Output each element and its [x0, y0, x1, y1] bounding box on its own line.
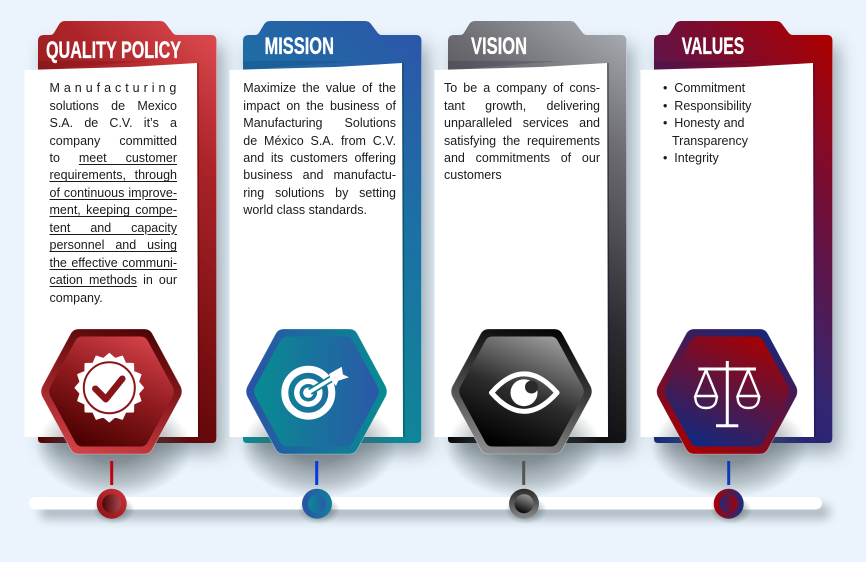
panel: vision [434, 21, 644, 495]
text: quality policy body: to meet customer [50, 151, 177, 165]
timeline [29, 461, 834, 524]
connector and node: quality policy [93, 461, 135, 524]
text: quality policy body: company. [50, 290, 103, 304]
text: vision body [444, 81, 600, 182]
text: values list: Honesty and [674, 116, 744, 130]
text: values list: • [663, 81, 667, 95]
text: quality policy body: requirements, through [50, 168, 177, 182]
text: vision body: unparalleled services and [444, 116, 600, 130]
text: quality policy body: solutions de Mexico [50, 99, 177, 113]
text: vision body: To be a company of cons- [444, 81, 600, 95]
icon: hexagon badge with seal and check [41, 329, 182, 454]
text: values list [663, 81, 752, 165]
card background: mission [243, 21, 422, 443]
text: quality policy body: S.A. de C.V. it’s a [50, 116, 177, 130]
text: quality policy body [50, 81, 180, 304]
timeline bar [29, 497, 822, 510]
icon: hexagon badge with target [246, 329, 387, 454]
text: mission body: de México S.A. from C.V. [243, 134, 396, 148]
connector and node: mission [298, 461, 340, 524]
heading: quality policy: QUALITY POLICY [46, 37, 181, 64]
text: values list: • [663, 116, 667, 130]
text: quality policy body: cation methods in our [50, 273, 177, 287]
heading: mission: MISSION [264, 33, 334, 60]
card background: vision [448, 21, 626, 443]
text: mission body: business and manufactu- [243, 168, 396, 182]
text: values list: Transparency [672, 134, 748, 148]
text: mission body: Manufacturing Solutions [243, 116, 396, 130]
card background: quality policy [38, 21, 216, 443]
text: values list: • [663, 151, 667, 165]
text: quality policy body: personnel and using [50, 238, 177, 252]
text: mission body: ring solutions by setting [243, 186, 396, 200]
panel: mission [230, 21, 440, 495]
heading: vision: VISION [471, 33, 527, 60]
text: mission body: Maximize the value of the [243, 81, 396, 95]
text: vision body: satisfying the requirements [444, 134, 600, 148]
text: vision body: tant growth, delivering [444, 99, 600, 113]
text: quality policy body: ment, keeping compe- [50, 203, 177, 217]
connector and node: values [710, 461, 752, 524]
heading: values: VALUES [682, 33, 744, 60]
text: quality policy body: of continuous improve- [50, 186, 177, 200]
text: mission body: and its customers offering [243, 151, 396, 165]
text: mission body: world class standards. [243, 203, 367, 217]
text: quality policy body: tent and capacity [50, 221, 177, 235]
text: values list: Responsibility [674, 99, 751, 113]
text: quality policy body: company committed [50, 134, 177, 148]
icon: hexagon badge with eye [451, 329, 592, 454]
connector and node: vision [505, 461, 547, 524]
panel: quality policy [24, 21, 234, 495]
text: mission body: impact on the business of [243, 99, 396, 113]
text: quality policy body: Manufacturing [50, 81, 180, 95]
text: values list: • [663, 99, 667, 113]
text: mission body [243, 81, 396, 217]
icon: hexagon badge with scales [657, 329, 797, 454]
text: values list: Integrity [674, 151, 719, 165]
text: vision body: and commitments of our [444, 151, 600, 165]
text: quality policy body: the effective communi- [50, 256, 177, 270]
text: values list: Commitment [674, 81, 745, 95]
text: vision body: customers [444, 168, 502, 182]
panel: values [640, 21, 850, 495]
card background: values [654, 21, 832, 443]
